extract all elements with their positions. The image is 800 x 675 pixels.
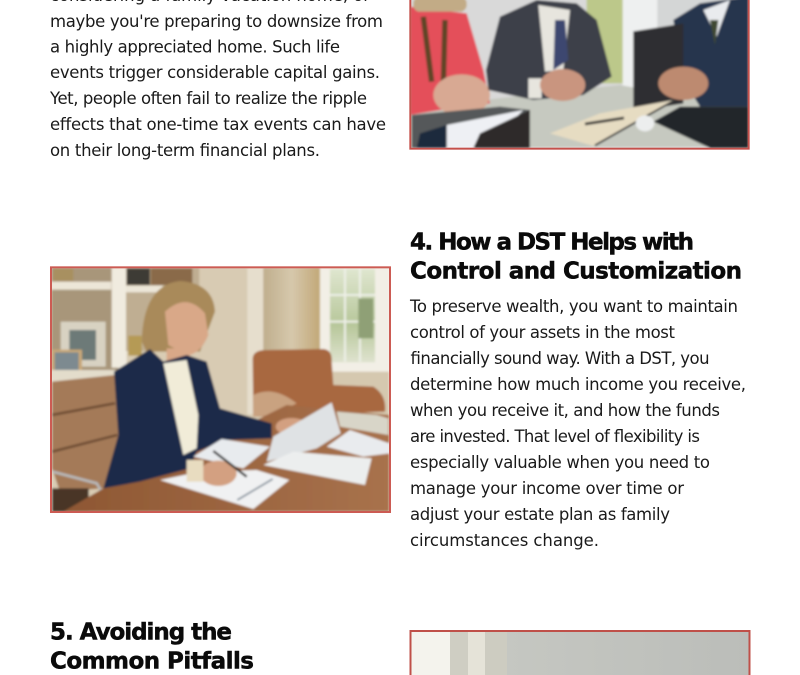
heading: section 4: 4. How a DST Helps with <box>410 230 694 256</box>
image: section 5 photo, cropped <box>410 631 750 675</box>
text block: section 4 body: control of your assets in the most <box>410 323 676 342</box>
text block: section 4 body <box>409 297 746 550</box>
jacket <box>103 349 272 488</box>
heading: section 5: Common Pitfalls <box>50 648 254 674</box>
text block: capital gains intro: Yet, people often fail to realize the ripple <box>49 89 367 108</box>
papers <box>193 439 270 468</box>
woman <box>410 7 490 115</box>
text block: section 4 body: circumstances change. <box>410 531 599 550</box>
text block: section 4 body: are invested. That level of flexibility is <box>410 427 700 446</box>
text block: section 4 body: adjust your estate plan as family <box>410 505 670 524</box>
hair + face <box>142 281 215 352</box>
table <box>63 405 389 512</box>
text block: capital gains intro: effects that one-time tax events can have <box>50 115 386 134</box>
wall + curtain <box>199 268 248 428</box>
hand + pen <box>200 461 237 486</box>
picture frames <box>61 322 106 367</box>
table <box>412 84 706 148</box>
text block: section 4 body: determine how much income you receive, <box>410 375 746 394</box>
text block: section 4 body: especially valuable when you need to <box>410 453 710 472</box>
advisor <box>673 0 749 107</box>
armchair <box>253 349 385 417</box>
heading: section 4: Control and Customization <box>410 258 742 284</box>
text block: section 4 body: when you receive it, and how the funds <box>410 401 720 420</box>
text block: capital gains intro: a highly appreciated home. Such life <box>50 38 340 56</box>
heading: section 5 <box>50 620 254 674</box>
text block: capital gains intro: maybe you're preparing to downsize from <box>50 12 383 31</box>
folio <box>653 107 749 148</box>
notebook <box>550 100 673 146</box>
glasses case <box>412 107 530 148</box>
image: couple meeting with advisor <box>410 0 749 149</box>
text block: section 4 body: financially sound way. With a DST, you <box>411 349 710 368</box>
heading: section 4 <box>410 230 742 284</box>
text block: section 4 body: To preserve wealth, you want to maintain <box>409 297 738 316</box>
older man <box>486 0 612 100</box>
text block: capital gains intro <box>49 0 386 160</box>
chair behind <box>52 375 119 492</box>
text block: section 4 body: manage your income over time or <box>410 479 684 498</box>
shelves <box>51 268 118 378</box>
text block: capital gains intro: on their long-term financial plans. <box>50 141 320 160</box>
heading: section 5: 5. Avoiding the <box>50 620 232 646</box>
image: woman reviewing documents <box>51 267 390 512</box>
text block: capital gains intro: events trigger considerable capital gains. <box>50 63 380 82</box>
